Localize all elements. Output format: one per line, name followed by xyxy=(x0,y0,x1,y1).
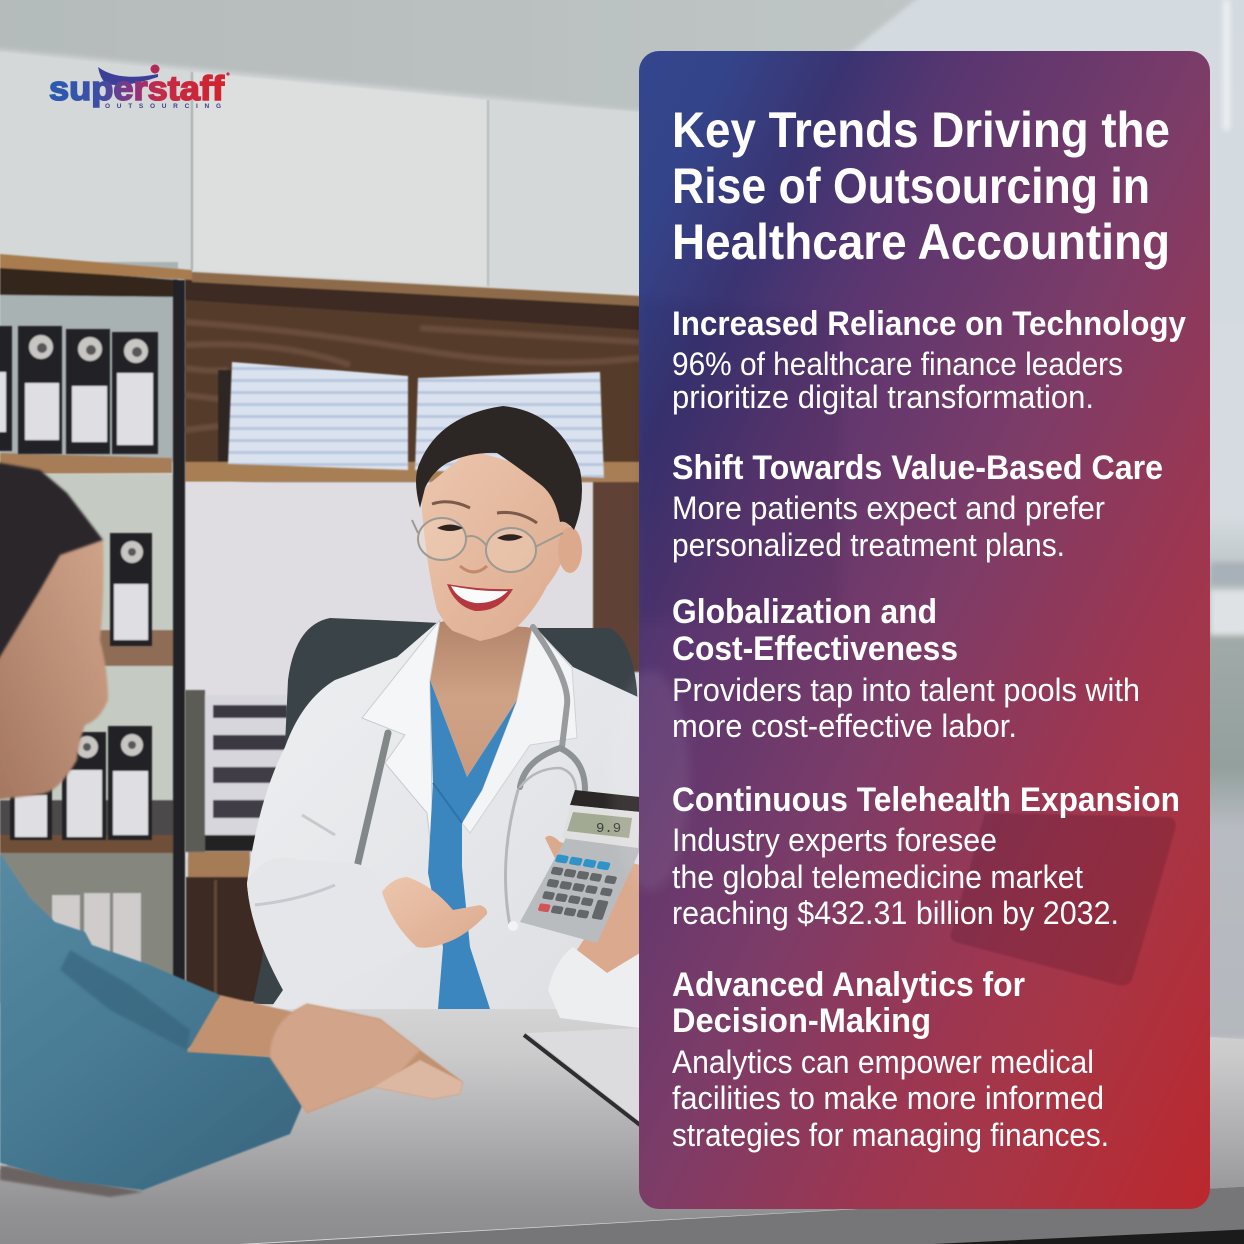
ear xyxy=(558,527,582,573)
open hand xyxy=(382,877,487,948)
trend: globalization: Providers tap into talent pools with xyxy=(672,672,1140,708)
hair xyxy=(416,406,582,530)
trend: analytics: Analytics can empower medical xyxy=(672,1044,1094,1080)
eyebrows xyxy=(432,502,537,523)
stethoscope bead xyxy=(508,921,518,931)
nose shadow xyxy=(460,566,487,572)
stethoscope chest piece xyxy=(328,865,358,895)
white coat xyxy=(247,620,640,1009)
calculator xyxy=(520,790,640,943)
trend: globalization: Cost-Effectiveness xyxy=(672,630,958,668)
logo: superstaff outsourcing: OUTSOURCING xyxy=(105,103,221,110)
title: Key Trends Driving the xyxy=(672,102,1170,158)
trend: globalization: more cost-effective labor. xyxy=(672,708,1017,744)
panel: key trends xyxy=(610,51,1210,1209)
shelf shadow seen through panel xyxy=(639,300,840,620)
document tray xyxy=(185,690,287,852)
ceiling xyxy=(0,0,930,112)
trend: technology: 96% of healthcare finance leaders xyxy=(672,346,1123,382)
title: Rise of Outsourcing in xyxy=(672,158,1150,214)
trend: globalization xyxy=(672,593,1140,744)
shirt folds xyxy=(60,950,190,1050)
trend: telehealth xyxy=(672,781,1180,931)
trend: technology xyxy=(672,305,1186,415)
trend: value-based care: Shift Towards Value-Based Care xyxy=(672,449,1163,487)
trend: telehealth: reaching $432.31 billion by 2032. xyxy=(672,895,1119,931)
trend: value-based care xyxy=(672,449,1163,563)
paper stacks xyxy=(228,362,604,478)
smile xyxy=(447,584,513,611)
desk xyxy=(0,1008,1244,1244)
title: Healthcare Accounting xyxy=(672,214,1170,270)
window curtain xyxy=(855,0,1244,1040)
trend: analytics: Advanced Analytics for xyxy=(672,966,1025,1004)
shirt xyxy=(0,853,302,1190)
wooden shelving xyxy=(0,254,640,672)
desk front edge xyxy=(240,1186,1244,1244)
neck xyxy=(430,620,535,777)
hair xyxy=(0,462,103,665)
left sleeve xyxy=(247,858,413,990)
logo: superstaff outsourcing: superstaff xyxy=(49,70,225,108)
trend: analytics xyxy=(672,966,1109,1153)
clipboard xyxy=(524,1028,640,1125)
forearm and hands xyxy=(187,995,463,1113)
doctor xyxy=(247,406,640,1028)
trend: technology: prioritize digital transformation. xyxy=(672,379,1094,415)
face xyxy=(0,540,108,800)
wall below shelf xyxy=(0,474,593,1003)
chair xyxy=(253,618,640,1008)
trend: telehealth: the global telemedicine market xyxy=(672,859,1083,895)
coat seen through panel xyxy=(610,670,690,890)
trend: analytics: facilities to make more informed xyxy=(672,1080,1104,1116)
display xyxy=(567,812,632,838)
trend: value-based care: personalized treatment plans. xyxy=(672,527,1065,563)
shadow under arm xyxy=(0,1165,143,1197)
blue scrubs xyxy=(428,680,517,1009)
buttons xyxy=(538,854,622,921)
trend: analytics: Decision-Making xyxy=(672,1002,931,1040)
patient xyxy=(0,462,463,1197)
trend: telehealth: Industry experts foresee xyxy=(672,822,997,858)
binders xyxy=(0,280,185,1005)
trend: technology: Increased Reliance on Technology xyxy=(672,305,1186,343)
left shelf bay xyxy=(0,262,178,462)
right lapel xyxy=(462,625,577,833)
monitor seen through panel xyxy=(951,813,1176,985)
right sleeve cuff xyxy=(548,947,640,1028)
hand holding calculator xyxy=(545,836,640,973)
eyes xyxy=(437,524,523,541)
trend: value-based care: More patients expect and prefer xyxy=(672,490,1105,526)
trend: analytics: strategies for managing finances. xyxy=(672,1117,1109,1153)
stethoscope xyxy=(357,627,585,926)
fingers xyxy=(373,1060,463,1099)
head xyxy=(412,406,582,641)
calculator: 9.9 xyxy=(596,821,621,837)
glasses xyxy=(412,518,563,572)
upper cabinets xyxy=(0,52,640,300)
trend: telehealth: Continuous Telehealth Expansion xyxy=(672,781,1180,819)
title xyxy=(672,102,1170,270)
trend: globalization: Globalization and xyxy=(672,593,937,631)
back of hand xyxy=(270,1004,420,1113)
left lapel xyxy=(362,620,440,867)
